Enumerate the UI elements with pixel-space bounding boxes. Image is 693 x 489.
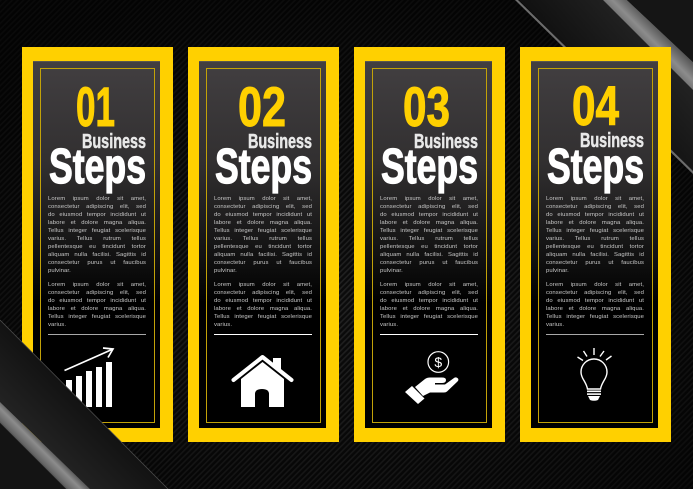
text block: lorem ipsum: Lorem ipsum dolor sit amet, — [48, 282, 146, 288]
heading: 03 Business Steps: Business — [414, 131, 478, 153]
text block: lorem ipsum: consectetur purus ut faucibus — [380, 260, 478, 266]
text block: lorem ipsum: pulvinar. — [546, 268, 569, 274]
text block: lorem ipsum: consectetur adipiscing elit, sed — [380, 204, 478, 210]
heading: 02 Business Steps — [215, 75, 312, 194]
panel: step 03 — [354, 47, 505, 442]
text block: lorem ipsum: consectetur adipiscing elit, sed — [546, 204, 644, 210]
text block: lorem ipsum: labore et dolore magna aliqua. — [546, 306, 644, 312]
icon: house — [231, 355, 294, 407]
text block: lorem ipsum: do eiusmod tempor incididunt ut — [380, 298, 478, 304]
text block: lorem ipsum: aliquam nulla facilisi. Sagittis id — [546, 252, 644, 258]
text block: lorem ipsum: Tellus integer feugiat scelerisque — [380, 228, 478, 234]
text block: lorem ipsum: Lorem ipsum dolor sit amet, — [380, 282, 478, 288]
text block: lorem ipsum: varius. — [48, 322, 66, 328]
text block: lorem ipsum: consectetur adipiscing elit, sed — [48, 290, 146, 296]
text block: lorem ipsum: varius. Tellus rutrum tellus — [546, 236, 644, 242]
text block: lorem ipsum: aliquam nulla facilisi. Sagittis id — [380, 252, 478, 258]
panel: step 01 — [22, 47, 173, 442]
text block: lorem ipsum — [214, 196, 312, 328]
heading: 01 Business Steps — [49, 75, 146, 194]
text block: lorem ipsum — [546, 196, 644, 328]
heading: 04 Business Steps: 04 — [572, 74, 619, 137]
text block: lorem ipsum: Lorem ipsum dolor sit amet, — [48, 196, 146, 202]
text block: lorem ipsum: pellentesque eu tincidunt tortor — [380, 244, 478, 250]
text block: lorem ipsum: varius. — [380, 322, 398, 328]
text block: lorem ipsum: consectetur purus ut faucibus — [48, 260, 146, 266]
text block: lorem ipsum: do eiusmod tempor incididunt ut — [48, 298, 146, 304]
text block: lorem ipsum: consectetur adipiscing elit, sed — [546, 290, 644, 296]
panel: step 02 — [188, 47, 339, 442]
heading: 03 Business Steps: 03 — [403, 75, 450, 138]
text block: lorem ipsum: Lorem ipsum dolor sit amet, — [546, 282, 644, 288]
text block: lorem ipsum: do eiusmod tempor incididunt ut — [48, 212, 146, 218]
text block: lorem ipsum: varius. Tellus rutrum tellus — [214, 236, 312, 242]
panel: step 04 — [520, 47, 671, 442]
text block: lorem ipsum: Tellus integer feugiat scelerisque — [546, 314, 644, 320]
text block: lorem ipsum: Tellus integer feugiat scelerisque — [48, 314, 146, 320]
text block: lorem ipsum: labore et dolore magna aliqua. — [380, 306, 478, 312]
heading: 04 Business Steps: Business — [580, 130, 644, 152]
text block: lorem ipsum: consectetur adipiscing elit, sed — [214, 204, 312, 210]
text block: lorem ipsum: pellentesque eu tincidunt tortor — [546, 244, 644, 250]
text block: lorem ipsum: Lorem ipsum dolor sit amet, — [380, 196, 478, 202]
text block: lorem ipsum: labore et dolore magna aliqua. — [214, 220, 312, 226]
icon: hand holding dollar coin — [405, 351, 458, 404]
text block: lorem ipsum: pulvinar. — [214, 268, 237, 274]
text block: lorem ipsum: labore et dolore magna aliqua. — [48, 306, 146, 312]
text block: lorem ipsum: varius. — [546, 322, 564, 328]
text block: lorem ipsum: pulvinar. — [48, 268, 71, 274]
text block: lorem ipsum: aliquam nulla facilisi. Sagittis id — [214, 252, 312, 258]
text block: lorem ipsum: Lorem ipsum dolor sit amet, — [214, 196, 312, 202]
text block: lorem ipsum: labore et dolore magna aliqua. — [214, 306, 312, 312]
text block: lorem ipsum — [380, 196, 478, 328]
text block: lorem ipsum: consectetur adipiscing elit, sed — [48, 204, 146, 210]
text block: lorem ipsum: consectetur purus ut faucibus — [214, 260, 312, 266]
text block: lorem ipsum: consectetur adipiscing elit, sed — [214, 290, 312, 296]
text block: lorem ipsum: Tellus integer feugiat scelerisque — [214, 314, 312, 320]
text block: lorem ipsum: do eiusmod tempor incididunt ut — [214, 212, 312, 218]
text block: lorem ipsum: consectetur purus ut faucibus — [546, 260, 644, 266]
heading: 02 Business Steps: Business — [248, 131, 312, 153]
text block: lorem ipsum: aliquam nulla facilisi. Sagittis id — [48, 252, 146, 258]
text block: lorem ipsum: varius. Tellus rutrum tellus — [380, 236, 478, 242]
heading: 01 Business Steps: Business — [82, 131, 146, 153]
text block: lorem ipsum: varius. Tellus rutrum tellus — [48, 236, 146, 242]
text block: lorem ipsum: do eiusmod tempor incididunt ut — [546, 212, 644, 218]
text block: lorem ipsum: pellentesque eu tincidunt tortor — [214, 244, 312, 250]
text block: lorem ipsum: pulvinar. — [380, 268, 403, 274]
icon: hand holding dollar coin: $ — [434, 354, 442, 370]
heading: 04 Business Steps — [547, 74, 644, 194]
text block: lorem ipsum: labore et dolore magna aliqua. — [48, 220, 146, 226]
icon: rising bar chart with arrow — [64, 347, 114, 407]
text block: lorem ipsum: Lorem ipsum dolor sit amet, — [214, 282, 312, 288]
text block: lorem ipsum: Tellus integer feugiat scelerisque — [48, 228, 146, 234]
text block: lorem ipsum — [48, 196, 146, 328]
text block: lorem ipsum: labore et dolore magna aliqua. — [380, 220, 478, 226]
heading: 01 Business Steps: 01 — [76, 75, 115, 138]
text block: lorem ipsum: Tellus integer feugiat scelerisque — [214, 228, 312, 234]
heading: 02 Business Steps: 02 — [238, 75, 286, 138]
text block: lorem ipsum: Tellus integer feugiat scelerisque — [546, 228, 644, 234]
text block: lorem ipsum: do eiusmod tempor incididunt ut — [214, 298, 312, 304]
heading: 03 Business Steps — [381, 75, 478, 194]
text block: lorem ipsum: varius. — [214, 322, 232, 328]
text block: lorem ipsum: do eiusmod tempor incididunt ut — [380, 212, 478, 218]
text block: lorem ipsum: consectetur adipiscing elit, sed — [380, 290, 478, 296]
text block: lorem ipsum: Tellus integer feugiat scelerisque — [380, 314, 478, 320]
text block: lorem ipsum: pellentesque eu tincidunt tortor — [48, 244, 146, 250]
text block: lorem ipsum: Lorem ipsum dolor sit amet, — [546, 196, 644, 202]
icon: light bulb with rays — [577, 348, 612, 401]
text block: lorem ipsum: do eiusmod tempor incididunt ut — [546, 298, 644, 304]
text block: lorem ipsum: labore et dolore magna aliqua. — [546, 220, 644, 226]
